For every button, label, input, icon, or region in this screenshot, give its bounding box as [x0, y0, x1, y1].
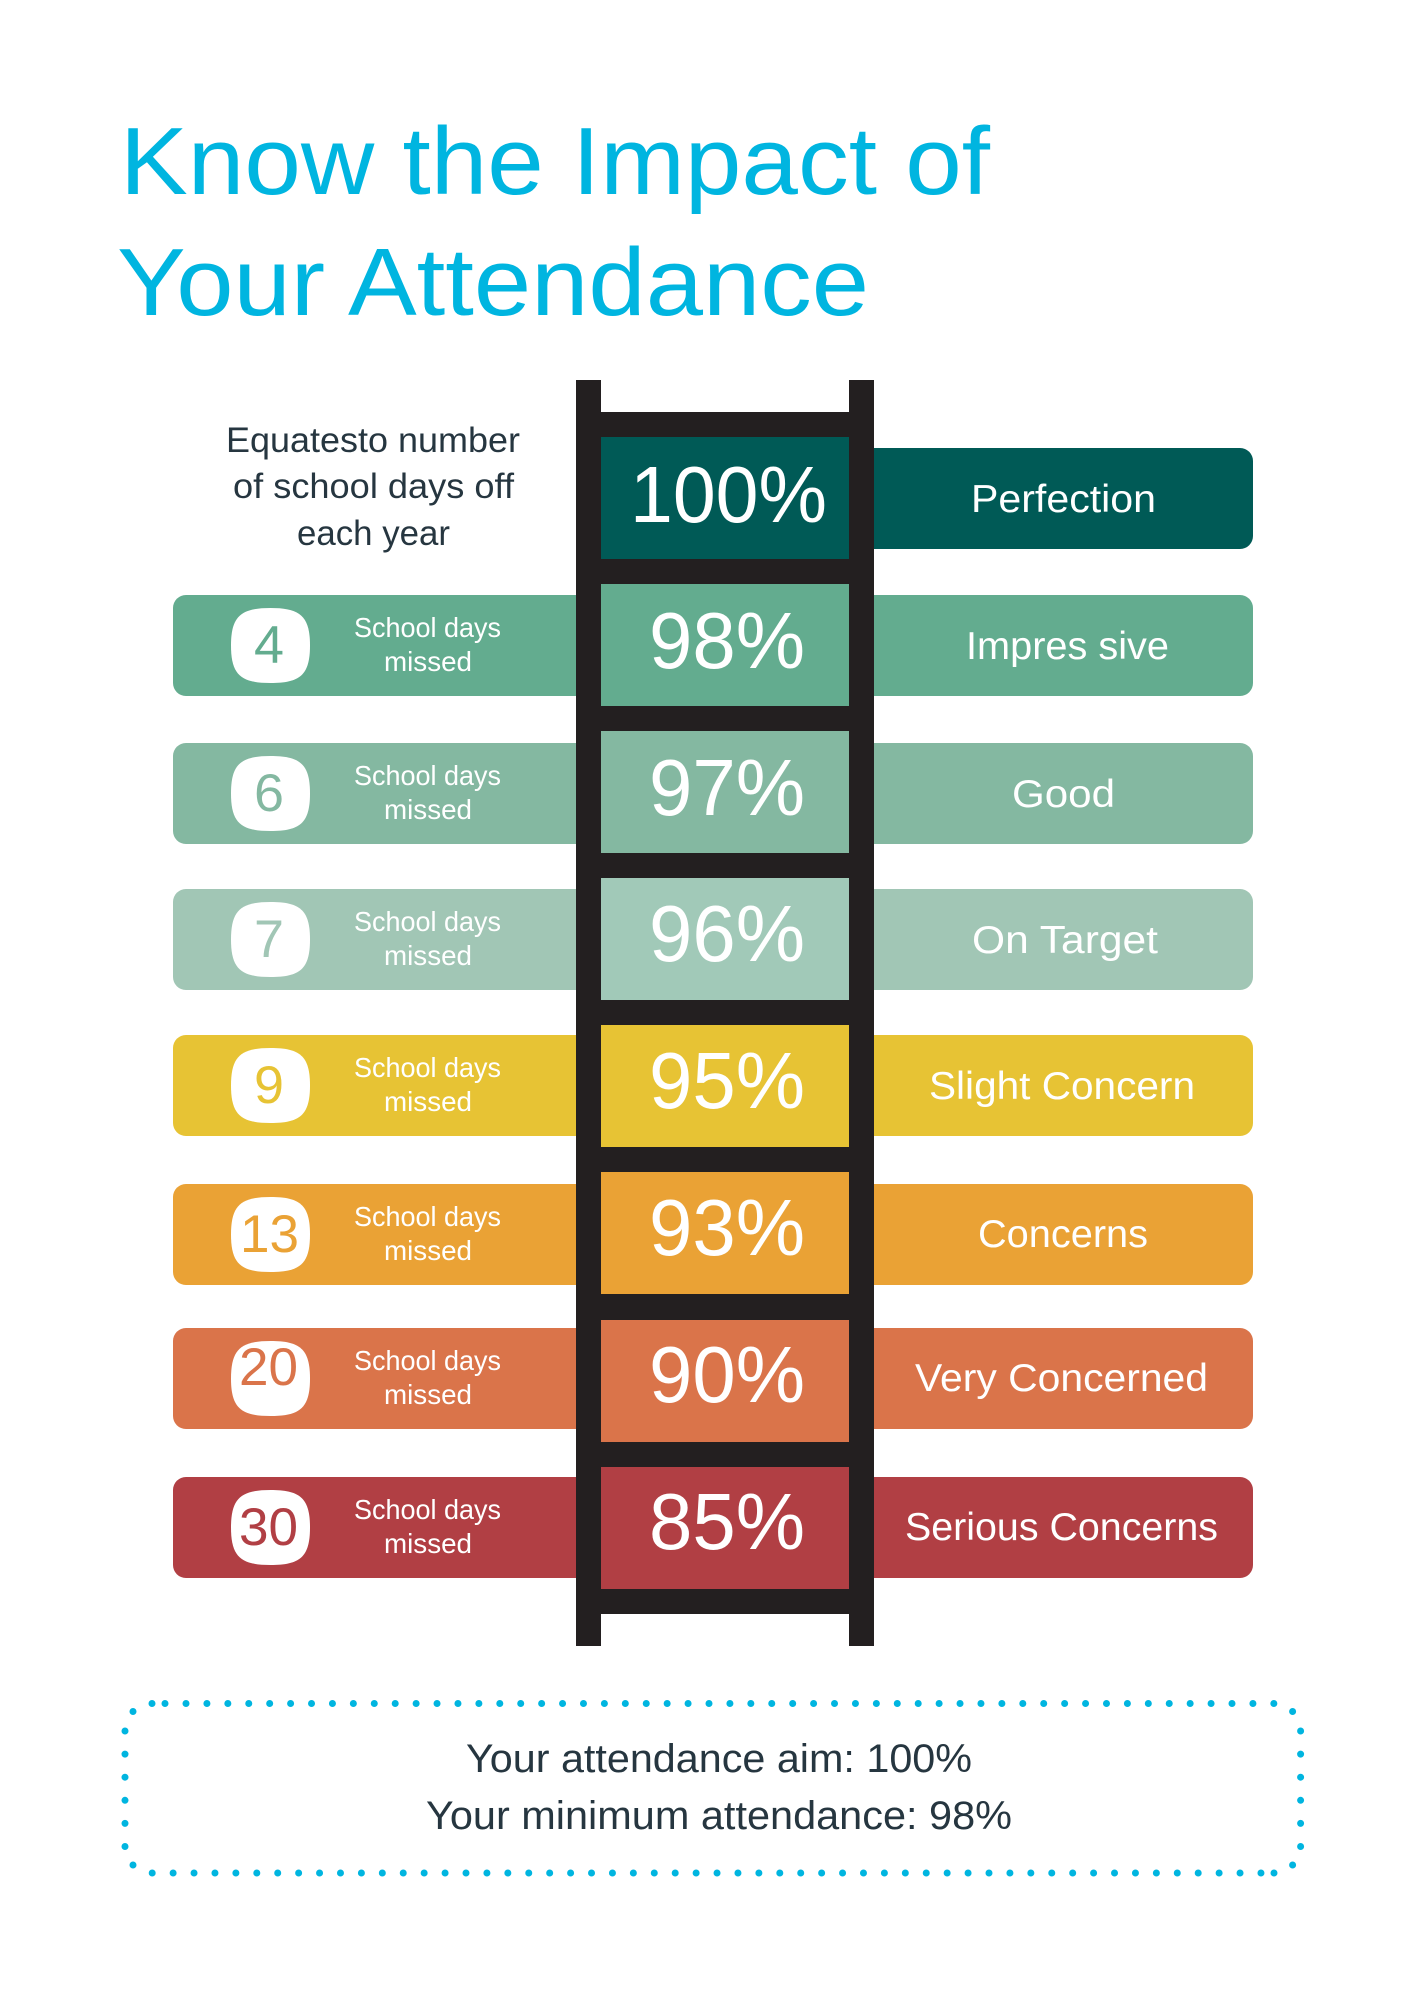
row: 85% Serious Concerns: 30 [239, 1498, 298, 1557]
row: 90% Very Concerned: 90% [649, 1330, 805, 1419]
title: Know the Impact of [120, 108, 990, 215]
callout text: Your attendance aim: 100% [466, 1737, 972, 1781]
row: 93% Concerns: missed [384, 1235, 472, 1266]
text block: equates to number of school days off each year: each year [297, 514, 450, 553]
ladder frame [576, 380, 874, 1646]
row: 97% Good: Good [1012, 773, 1115, 816]
row: 93% Concerns: Concerns [978, 1213, 1148, 1256]
row: 90% Very Concerned [173, 1320, 1253, 1442]
row: 95% Slight Concern: 95% [649, 1036, 805, 1125]
row: 98% Impressive: Impres sive [966, 625, 1169, 668]
dotted callout border [125, 1704, 1301, 1873]
title [117, 108, 990, 336]
row: 85% Serious Concerns: 85% [649, 1477, 805, 1566]
row: 95% Slight Concern [173, 1025, 1253, 1147]
row: 96% On Target: missed [384, 940, 472, 971]
row: 96% On Target: 96% [649, 889, 805, 978]
callout text [426, 1737, 1012, 1838]
row: 97% Good: 97% [649, 743, 805, 832]
row: 85% Serious Concerns: Serious Concerns [905, 1506, 1218, 1549]
row: 90% Very Concerned: 20 [239, 1338, 298, 1397]
row: 97% Good [173, 731, 1253, 853]
row: 93% Concerns: 13 [240, 1205, 299, 1264]
row: 96% On Target: On Target [972, 919, 1158, 962]
row: 100% Perfection: 100% [630, 450, 827, 539]
title: Your Attendance [117, 229, 869, 336]
row: 100% Perfection [601, 437, 1253, 559]
row: 93% Concerns: 93% [649, 1183, 805, 1272]
row: 85% Serious Concerns [173, 1467, 1253, 1589]
row: 97% Good: missed [384, 794, 472, 825]
row: 98% Impressive: 4 [254, 616, 284, 675]
row: 85% Serious Concerns: School days [354, 1494, 501, 1525]
row: 96% On Target: 7 [254, 910, 284, 969]
row: 90% Very Concerned: missed [384, 1379, 472, 1410]
row: 95% Slight Concern: 9 [254, 1056, 284, 1115]
row: 98% Impressive: missed [384, 646, 472, 677]
text block: equates to number of school days off each year: of school days off [233, 467, 514, 506]
callout text: Your minimum attendance: 98% [426, 1794, 1012, 1838]
row: 98% Impressive: 98% [649, 596, 805, 685]
row: 95% Slight Concern: Slight Concern [929, 1065, 1195, 1108]
row: 97% Good: 6 [254, 764, 284, 823]
row: 90% Very Concerned: Very Concerned [915, 1357, 1208, 1400]
row: 95% Slight Concern: missed [384, 1086, 472, 1117]
row: 100% Perfection: Perfection [971, 478, 1156, 521]
row: 93% Concerns: School days [354, 1201, 501, 1232]
text block: equates to number of school days off each year [226, 421, 520, 553]
row: 96% On Target: School days [354, 906, 501, 937]
text block: equates to number of school days off each year: Equatesto number [226, 421, 520, 460]
row: 98% Impressive: School days [354, 612, 501, 643]
row: 98% Impressive [173, 584, 1253, 706]
row: 95% Slight Concern: School days [354, 1052, 501, 1083]
row: 90% Very Concerned: School days [354, 1345, 501, 1376]
row: 93% Concerns [173, 1172, 1253, 1294]
row: 96% On Target [173, 878, 1253, 1000]
row: 85% Serious Concerns: missed [384, 1528, 472, 1559]
row: 97% Good: School days [354, 760, 501, 791]
